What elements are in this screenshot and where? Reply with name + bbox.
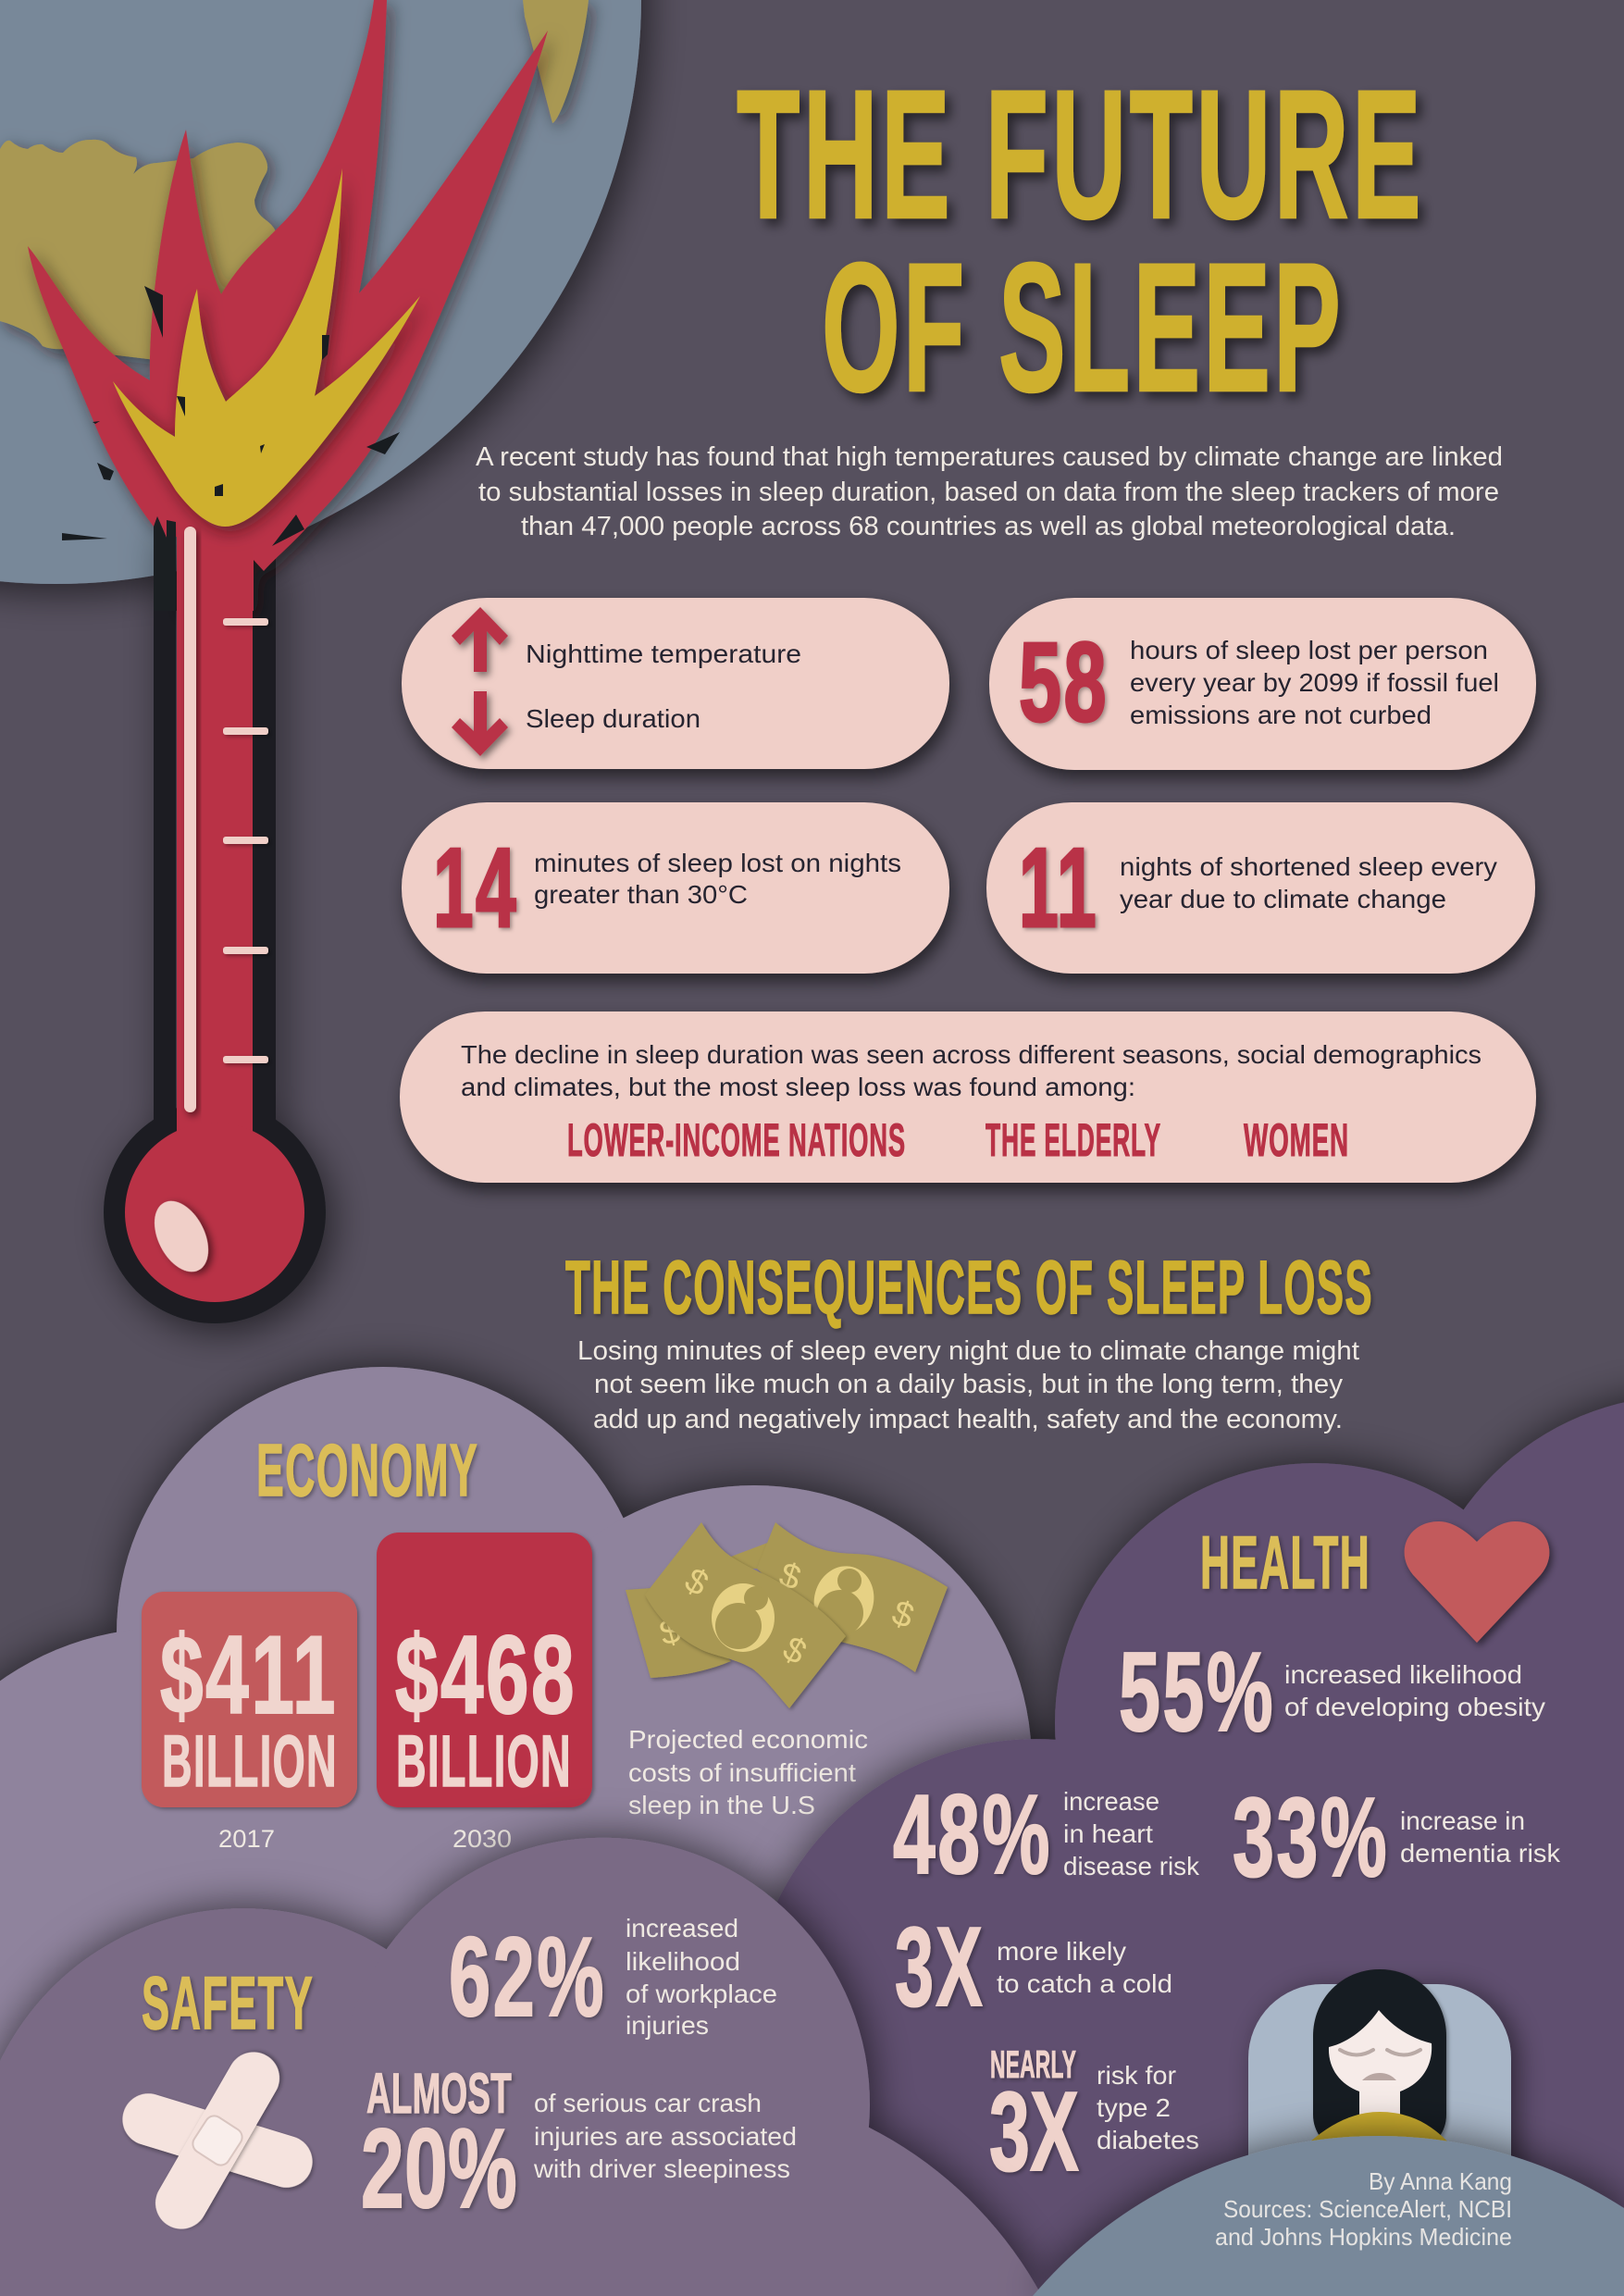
stat: nearly 3X diabetes: NEARLY: [990, 2042, 1076, 2086]
pillow: [1248, 1984, 1511, 2184]
stat: nearly 3X diabetes: [989, 2042, 1079, 2194]
description: and climates, but the most sleep loss was found among:: [461, 1073, 1135, 1101]
groups: LOWER-INCOME NATIONS: [567, 1114, 906, 1166]
stat box: 2030: [377, 1533, 592, 1807]
stat description: obesity: of developing obesity: [1284, 1693, 1545, 1721]
tube highlight: [184, 527, 196, 1112]
stat description: [1120, 852, 1497, 913]
intro text: to substantial losses in sleep duration, based on data from the sleep trackers of more: [478, 478, 1499, 507]
stat description: car crash: with driver sleepiness: [533, 2154, 790, 2183]
stat description: diabetes: [1097, 2061, 1199, 2154]
stat description: [1130, 636, 1499, 729]
description: [461, 1040, 1481, 1101]
consequences intro text: not seem like much on a daily basis, but in the long term, they: [594, 1370, 1343, 1399]
consequences intro text: Losing minutes of sleep every night due to climate change might: [577, 1336, 1359, 1366]
label: nighttime temperature: Nighttime temperature: [526, 639, 801, 668]
dark left casing over flame: [154, 516, 177, 611]
credits: Sources: ScienceAlert, NCBI: [1223, 2195, 1512, 2223]
stat box: 2017: $411: [160, 1613, 338, 1737]
icon: money bills: $: [775, 1556, 805, 1598]
stat description: greater than 30°C: [534, 880, 748, 909]
face: [1329, 2010, 1432, 2119]
thermometer right casing: [254, 546, 276, 1148]
thermometer: [28, 0, 548, 1323]
stat: almost 20%: 20%: [361, 2105, 517, 2231]
title: [737, 52, 1424, 429]
stat description: [534, 849, 901, 909]
icon: down arrow: [452, 691, 508, 756]
intro text: A recent study has found that high temperatures caused by climate change are linked: [476, 442, 1503, 472]
stat description: workplace injuries: injuries: [626, 2011, 709, 2040]
bulb: [125, 1123, 304, 1302]
flame embers: [62, 286, 400, 546]
stat description: cold: to catch a cold: [997, 1969, 1172, 1998]
money caption: sleep in the U.S: [628, 1791, 815, 1819]
globe disc: [0, 0, 641, 584]
stat description: heart disease: increase: [1063, 1787, 1159, 1816]
stat box: 2017: [142, 1592, 357, 1807]
bulb highlight: [143, 1192, 219, 1281]
continents: [0, 0, 589, 370]
stat: 48%: 48%: [893, 1771, 1052, 1897]
cloud shape: [749, 1396, 1624, 2296]
panel: 11 nights: [986, 802, 1535, 974]
stat description: workplace injuries: likelihood: [626, 1947, 740, 1976]
label: sleep duration: Sleep duration: [526, 704, 700, 733]
stat description: minutes of sleep lost on nights: [534, 849, 901, 877]
icon: up arrow: [452, 607, 508, 672]
stat description: diabetes: diabetes: [1097, 2126, 1199, 2154]
stat description: hours of sleep lost per person: [1130, 636, 1488, 664]
money caption: costs of insufficient: [628, 1758, 856, 1787]
money caption: [628, 1725, 868, 1819]
stat description: nights of shortened sleep every: [1120, 852, 1497, 881]
stat description: workplace injuries: of workplace: [626, 1980, 777, 2008]
stat description: cold: [997, 1937, 1172, 1998]
stat description: dementia: dementia risk: [1400, 1839, 1561, 1868]
panel: 14 minutes: [402, 802, 949, 974]
groups: THE ELDERLY: [986, 1114, 1161, 1166]
heading: health: HEALTH: [1200, 1521, 1370, 1605]
icon: money bills: [626, 1522, 948, 1708]
stat description: car crash: injuries are associated: [534, 2122, 797, 2151]
footer mound: [1033, 2136, 1624, 2296]
stat box: 2030: BILLION: [396, 1719, 572, 1802]
stat description: every year by 2099 if fossil fuel: [1130, 668, 1499, 697]
stat: 62%: 62%: [449, 1914, 606, 2040]
panel: most affected groups: [400, 1011, 1536, 1183]
description: The decline in sleep duration was seen across different seasons, social demographics: [461, 1040, 1481, 1069]
year labels: 2030: [452, 1825, 512, 1853]
stat: 3X cold: 3X: [895, 1904, 985, 2029]
panel: economy cloud: [0, 1367, 1032, 2296]
stat: almost 20%: ALMOST: [366, 2062, 512, 2125]
heading: economy: ECONOMY: [256, 1429, 478, 1511]
consequences intro text: [577, 1336, 1359, 1434]
stat description: dementia: increase in: [1400, 1806, 1525, 1835]
stat: nearly 3X diabetes: 3X: [989, 2068, 1079, 2194]
closed eyes: [1340, 2050, 1420, 2054]
blanket: [1309, 2112, 1450, 2144]
stat description: diabetes: risk for: [1097, 2061, 1176, 2090]
stat description: workplace injuries: increased: [626, 1914, 738, 1942]
icon: money bills: $: [776, 1629, 812, 1672]
stat: 58: 58: [1019, 619, 1109, 745]
stat box: 2017: BILLION: [162, 1719, 338, 1802]
stat description: emissions are not curbed: [1130, 701, 1432, 729]
yellow flame: [113, 168, 420, 527]
credits: By Anna Kang: [1369, 2167, 1512, 2195]
stat description: car crash: of serious car crash: [534, 2089, 762, 2117]
cloud shape: [0, 1838, 1042, 2296]
mercury column: [177, 546, 253, 1231]
stat description: car crash: [533, 2089, 797, 2183]
icon: money bills: $: [678, 1560, 714, 1604]
credits: and Johns Hopkins Medicine: [1215, 2223, 1512, 2251]
stat description: year due to climate change: [1120, 885, 1446, 913]
stat description: obesity: increased likelihood: [1284, 1660, 1522, 1689]
cloud shape: [0, 1367, 1032, 2296]
illustration: sleeping woman: [1248, 1969, 1511, 2184]
icon: heart: [1405, 1521, 1549, 1643]
stat description: diabetes: type 2: [1097, 2093, 1171, 2122]
stat: 11: 11: [1019, 825, 1098, 950]
globe with continents: [0, 0, 641, 584]
mouth: [1362, 2073, 1396, 2080]
year labels: [218, 1825, 512, 1853]
year labels: 2017: [218, 1825, 275, 1853]
intro text: than 47,000 people across 68 countries as well as global meteorological data.: [521, 512, 1456, 541]
stat description: workplace injuries: [626, 1914, 777, 2040]
money caption: Projected economic: [628, 1725, 868, 1754]
icon: money bills: $: [887, 1594, 919, 1636]
stat description: heart disease: disease risk: [1063, 1852, 1200, 1880]
consequences intro text: add up and negatively impact health, safety and the economy.: [593, 1405, 1343, 1434]
panel: 58 hours: [989, 598, 1536, 770]
stat description: dementia: [1400, 1806, 1561, 1868]
credits: [1215, 2167, 1512, 2251]
stat description: heart disease: in heart: [1063, 1819, 1153, 1848]
stat description: heart disease: [1063, 1787, 1200, 1880]
stat: almost 20%: [361, 2062, 517, 2231]
panel: safety cloud: [0, 1838, 1042, 2296]
intro text: [476, 442, 1503, 541]
tick marks: [223, 618, 268, 1063]
hair: [1313, 1969, 1446, 2138]
groups: WOMEN: [1244, 1114, 1349, 1166]
panel: nighttime temperature and sleep duration: [402, 598, 949, 769]
stat: 14: 14: [433, 825, 518, 950]
heading: safety: SAFETY: [142, 1962, 314, 2045]
stat box: 2030: $468: [395, 1613, 576, 1737]
icon: money bills: $: [656, 1611, 685, 1654]
thermometer tube and bulb casing: [104, 516, 326, 1323]
stat: 55%: 55%: [1119, 1629, 1275, 1755]
stat description: cold: more likely: [997, 1937, 1126, 1966]
red flame: [28, 0, 548, 611]
icon: bandage: [116, 2042, 319, 2239]
panel: health cloud: [749, 1396, 1624, 2296]
stat description: obesity: [1284, 1660, 1545, 1721]
stat: 33%: 33%: [1233, 1774, 1389, 1900]
